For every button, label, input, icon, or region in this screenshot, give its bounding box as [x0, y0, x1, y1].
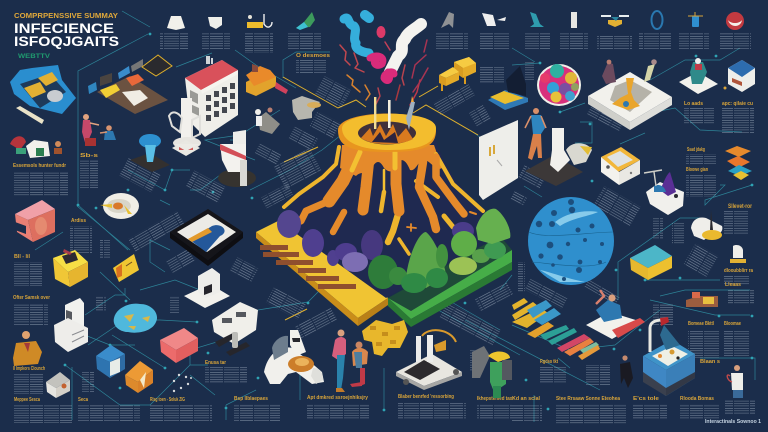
illustration: blue-yellow bar	[488, 90, 528, 110]
illustration: woman in blue	[525, 108, 546, 160]
icon: teal base	[296, 22, 308, 30]
illustration: 3D printer	[396, 330, 462, 390]
title block	[14, 11, 119, 60]
illustration: yellow box	[53, 249, 88, 287]
illustration: isometric mat	[88, 55, 172, 114]
section headings: Blaber benrfed 'ressorbing	[398, 394, 454, 400]
stair treads	[260, 245, 356, 289]
illustration: gray mixer	[292, 96, 321, 120]
section headings: Sb-s	[80, 153, 98, 159]
icon: drone	[601, 15, 629, 27]
base: green platform	[388, 236, 512, 327]
icon: red badge	[726, 12, 744, 30]
section headings: Bll - lil	[14, 254, 31, 260]
squiggles	[340, 40, 428, 105]
illustration: blue device	[10, 65, 76, 124]
lava: upper skirt	[340, 145, 442, 176]
illustration: blue box	[96, 345, 125, 378]
icon: white dome	[167, 16, 185, 30]
section headings: Ssad jdakg	[687, 147, 705, 153]
illustration: freezer	[643, 317, 695, 396]
icon: white tower	[571, 12, 577, 28]
illustration: white mound with purple wing	[644, 170, 684, 215]
right column illustrations	[246, 57, 755, 398]
icon: blue ring	[652, 11, 662, 29]
section headings: Apt dmkred ssroejnhiksjry	[307, 395, 368, 401]
illustration: white plinth	[174, 144, 200, 151]
plume: magenta	[370, 56, 394, 80]
illustration: shop stand	[686, 292, 718, 307]
illustration: white blob w/ yellow drum	[691, 210, 722, 240]
icon: white cylinder	[208, 17, 222, 29]
section headings: Lleaas	[725, 282, 741, 288]
section headings: Enusa tar	[205, 360, 226, 366]
illustration: man in white	[727, 365, 743, 398]
section headings: Rlsg toen - Soluk ZIG	[150, 397, 185, 403]
illustration: dark oval screen	[506, 66, 526, 96]
lava: yellow highlights	[352, 152, 395, 190]
illustration: blue fountain	[130, 134, 170, 172]
base: yellow platform	[256, 220, 388, 326]
section headings	[13, 53, 753, 403]
illustration: colored rows	[512, 298, 600, 360]
section headings: Bsp Ilblaepaes	[234, 396, 268, 402]
illustration: molecule dots	[173, 374, 192, 392]
illustration: pink box	[15, 200, 55, 242]
section headings: Seca	[78, 397, 88, 403]
section headings: Rgdso tkt	[540, 359, 558, 365]
illustration: gold hex cluster	[362, 320, 408, 356]
center bottom illustrations	[212, 302, 512, 398]
section headings: Meppee Sesca	[14, 397, 40, 403]
mountain body	[280, 140, 486, 298]
section headings: Lo aads	[684, 101, 703, 107]
illustration: dark figure	[620, 355, 633, 388]
illustration: yellow-orange crate	[246, 64, 288, 96]
illustration: colored diamonds	[725, 146, 752, 180]
illustration: salmon container	[160, 328, 198, 363]
lava: yellow edges	[284, 147, 483, 254]
illustration: person at desk	[586, 290, 645, 339]
illustration: white cabinet	[54, 298, 88, 352]
section headings: O desmoes	[296, 53, 330, 59]
tag: WEBTTV	[18, 54, 50, 60]
illustration: yellow-teal slab	[630, 245, 672, 280]
illustration: blue drum	[724, 60, 755, 92]
rim	[338, 114, 436, 152]
headline: INFECIENCE	[14, 21, 114, 36]
illustration: person in green	[472, 346, 512, 398]
illustration: white instrument	[169, 98, 201, 156]
plume: white	[390, 24, 421, 72]
illustration: tiny figure plate	[679, 58, 718, 94]
illustration: black tray	[170, 209, 243, 266]
section headings: Ardiss	[71, 218, 86, 224]
illustration: yellow blocks	[439, 57, 476, 91]
section headings: dlooubblirr ra	[724, 268, 753, 274]
section headings: Rlooda Bomas	[680, 396, 714, 402]
crater vents	[374, 96, 415, 130]
section headings: apc: qilaie cu	[722, 101, 753, 107]
illustration: small astronaut	[730, 245, 746, 263]
illustration: two people	[332, 330, 368, 392]
illustration: gray figures	[255, 108, 280, 134]
illustration: plate	[100, 193, 139, 219]
yellow feed lines	[283, 77, 478, 320]
section headings: Ikhepstemed taxr	[477, 396, 514, 402]
section headings: Stee Rrsaaw Sonne Eteohea	[556, 396, 620, 402]
volcano	[256, 96, 512, 327]
illustration: white lab machine	[525, 128, 592, 186]
illustration: hospital building	[185, 56, 238, 137]
icon: yellow tool	[247, 14, 272, 28]
illustration: person in orange	[13, 331, 42, 366]
illustration: red-banded column	[218, 130, 256, 187]
left column illustrations	[10, 55, 256, 398]
title block: ISFOQJGAITS	[14, 34, 119, 49]
plume: pink drop	[376, 26, 386, 38]
illustration: white fridge	[479, 120, 518, 200]
illustration: white rover	[212, 302, 258, 356]
illustration: small yellow box	[113, 254, 139, 282]
green hills	[368, 209, 510, 293]
section headings: Bloowe gian	[686, 167, 708, 173]
icon: green leaf	[296, 12, 315, 28]
icon: white machine	[482, 13, 506, 26]
section headings: Sllevet-ror	[728, 204, 753, 210]
connector nodes	[64, 33, 753, 411]
section headings: Il Impkors Clounch	[13, 366, 45, 372]
illustration: orange box	[125, 361, 153, 393]
illustration: white-yellow tub	[601, 147, 640, 185]
purple hills	[277, 210, 474, 272]
plume: cyan	[344, 18, 369, 53]
section headings: Ofter Samsk over	[13, 295, 50, 301]
section headings: Kd an sclal	[512, 396, 541, 402]
illustration: white platform	[588, 59, 672, 130]
illustration: white vehicle	[264, 330, 324, 384]
crater	[358, 122, 416, 144]
smoke plumes	[340, 15, 428, 105]
section headings: E'cs tole	[633, 396, 659, 402]
kicker: COMPRPENSSIVE SUMMAY	[14, 11, 118, 20]
illustration: children	[82, 114, 116, 146]
icon: teal chair	[530, 12, 544, 27]
footer credit: Interactinals Sownoo 1	[705, 419, 761, 425]
section headings: Bomeae Bkttl	[688, 321, 714, 327]
section headings: Bloomae	[724, 321, 741, 327]
illustration: group cluster	[10, 136, 62, 158]
illustration: small machine	[184, 268, 230, 308]
illustration: cyan map	[114, 304, 157, 333]
illustration: blue globe	[528, 197, 614, 285]
icon: blue device	[688, 12, 703, 27]
illustration: gray box	[46, 372, 70, 398]
isometric captions	[119, 76, 718, 346]
top row icons	[167, 11, 744, 30]
icon: gray tool	[441, 12, 454, 28]
section headings: Blaan s	[700, 359, 720, 365]
section headings: Essemsols hunter fundr	[13, 163, 66, 169]
illustration: mosaic sphere	[537, 64, 581, 106]
lava: orange fingers	[301, 154, 476, 232]
